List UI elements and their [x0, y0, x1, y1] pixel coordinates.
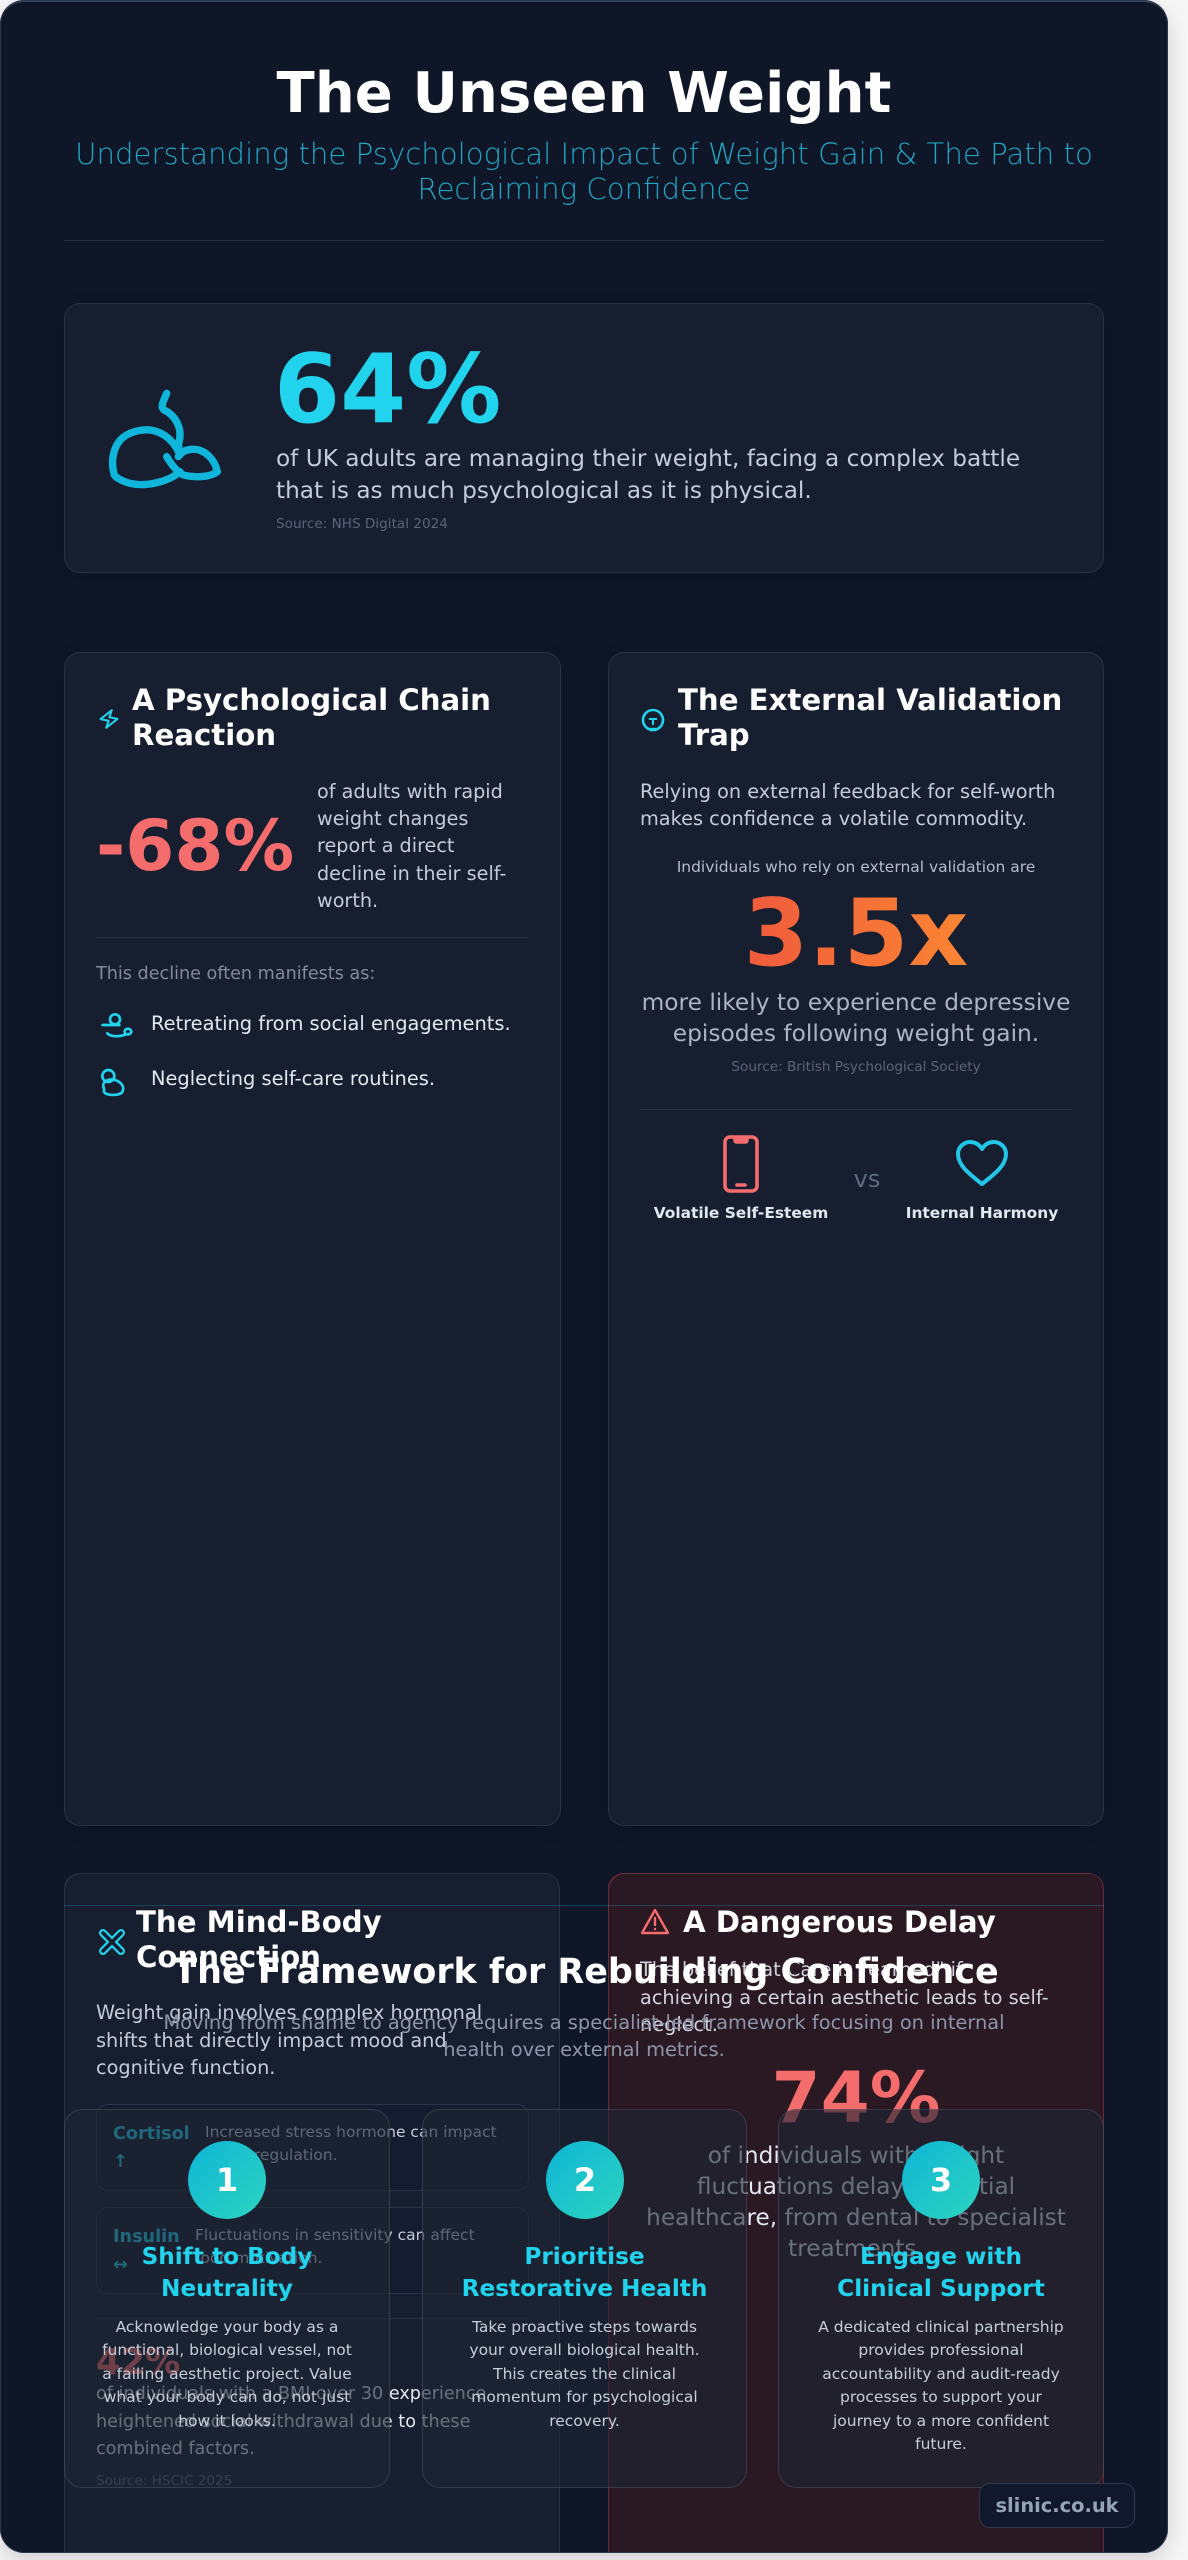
vs label: vs: [854, 1165, 880, 1193]
stat description: treatments.: [788, 2234, 924, 2262]
stat: 42%: 42%: [96, 2342, 180, 2383]
stat description: worth.: [317, 889, 378, 912]
label: Volatile Self-Esteem: [654, 1204, 828, 1222]
step text: accountability and audit-ready: [822, 2365, 1060, 2383]
hero description: [276, 445, 1020, 504]
icon: warning triangle: [640, 1908, 670, 1934]
stat: 74%: 74%: [772, 2056, 940, 2138]
stat: -68%: -68%: [96, 804, 294, 887]
body text: shifts that directly impact mood and: [96, 2029, 447, 2052]
stat description: weight changes: [317, 807, 468, 830]
badge: slinic.co.uk: slinic.co.uk: [995, 2494, 1119, 2517]
metric name: [113, 2227, 180, 2275]
body text: [96, 2001, 482, 2079]
step title: [837, 2243, 1045, 2302]
stat description: of individuals with weight: [708, 2142, 1004, 2168]
metric name: ↑: [113, 2152, 128, 2172]
step number: 1: [216, 2161, 238, 2199]
heading: Connection: [136, 1940, 321, 1974]
heading: [678, 682, 1062, 752]
step text: recovery.: [549, 2412, 620, 2430]
metric description: [205, 2122, 497, 2164]
framework heading: The Framework for Rebuilding Confidence: [173, 1952, 999, 1992]
icon: bolt: [100, 709, 118, 729]
step text: what your body can do, not just: [104, 2388, 350, 2406]
panel: external validation trap: [608, 652, 1104, 1826]
step text: Acknowledge your body as a: [116, 2318, 338, 2336]
stat description: of individuals with a BMI over 30 experience: [96, 2384, 486, 2404]
step text: journey to a more confident: [833, 2412, 1049, 2430]
step title: Engage with: [860, 2243, 1022, 2270]
stat description: [642, 989, 1070, 1047]
step text: a failing aesthetic project. Value: [102, 2365, 352, 2383]
framework subtitle: Moving from shame to agency requires a specialist-led framework focusing on internal: [163, 2011, 1005, 2034]
heading: [136, 1904, 382, 1974]
metric description: Increased stress hormone can impact: [205, 2122, 497, 2140]
stat description: [317, 780, 506, 912]
heading: [132, 683, 491, 752]
step number: [546, 2141, 624, 2219]
step title: Restorative Health: [462, 2274, 707, 2302]
stat description: [646, 2142, 1066, 2262]
step title: Prioritise: [524, 2243, 645, 2270]
body text: Weight gain involves complex hormonal: [96, 2001, 482, 2024]
source: Source: HSCIC 2025: [96, 2473, 232, 2489]
heading: The Mind-Body: [136, 1904, 382, 1938]
stat description: fluctuations delay essential: [697, 2172, 1015, 2200]
step text: processes to support your: [840, 2388, 1042, 2406]
stat description: [96, 2384, 486, 2459]
hero description: that is as much psychological as it is physical.: [276, 477, 812, 504]
step number: [902, 2141, 980, 2219]
step title: [462, 2243, 707, 2302]
manifests intro: This decline often manifests as:: [96, 964, 375, 984]
step number: [188, 2141, 266, 2219]
step text: [469, 2318, 700, 2430]
step number: 3: [930, 2161, 952, 2199]
panel: hero stat: [64, 303, 1104, 573]
panel: dangerous delay: [608, 1873, 1104, 2553]
card: step 3: [778, 2109, 1104, 2488]
step text: Take proactive steps towards: [472, 2318, 697, 2336]
metric name: ↔: [113, 2255, 128, 2275]
framework subtitle: [163, 2011, 1005, 2061]
stat description: heightened social withdrawal due to these: [96, 2412, 470, 2432]
step text: your overall biological health.: [469, 2341, 700, 2359]
step text: [102, 2318, 352, 2430]
framework section: [64, 1905, 1104, 2489]
hero description: of UK adults are managing their weight, facing a complex battle: [276, 445, 1020, 472]
metric name: Cortisol: [113, 2124, 190, 2144]
intro text: Relying on external feedback for self-worth: [640, 780, 1055, 802]
title: The Unseen Weight: [277, 61, 891, 126]
card: step 2: [422, 2109, 747, 2488]
body text: achieving a certain aesthetic leads to self-: [640, 1986, 1049, 2009]
stat description: of adults with rapid: [317, 780, 503, 803]
metric description: Fluctuations in sensitivity can affect: [195, 2226, 475, 2244]
stat description: combined factors.: [96, 2439, 255, 2459]
metric description: [195, 2226, 475, 2267]
icon: social retreat: [101, 1013, 133, 1038]
source: Source: British Psychological Society: [731, 1059, 981, 1075]
intro text: makes confidence a volatile commodity.: [640, 807, 1027, 830]
heading: Reaction: [132, 718, 276, 752]
body text: neglect.: [640, 2013, 718, 2036]
stat description: healthcare, from dental to specialist: [646, 2204, 1066, 2230]
metric description: food motivation.: [195, 2249, 322, 2267]
badge: slinic.co.uk: [979, 2483, 1135, 2528]
subtitle: Understanding the Psychological Impact of Weight Gain & The Path to: [75, 137, 1093, 171]
subtitle: Reclaiming Confidence: [417, 172, 751, 206]
metric description: mood regulation.: [205, 2146, 337, 2164]
icon: cross: [99, 1929, 125, 1955]
source: Source: NHS Digital 2024: [276, 516, 448, 532]
body text: cognitive function.: [96, 2056, 275, 2079]
step text: [818, 2318, 1064, 2453]
metric name: Insulin: [113, 2227, 180, 2247]
framework subtitle: health over external metrics.: [443, 2038, 725, 2061]
stat: 3.5x: 3.5x: [744, 878, 968, 986]
subtitle: [75, 137, 1093, 206]
step text: future.: [915, 2435, 967, 2453]
panel: psychological chain reaction: [64, 652, 561, 1826]
intro text: [640, 780, 1055, 830]
label: Internal Harmony: [906, 1204, 1058, 1222]
stat description: report a direct: [317, 834, 454, 857]
card: step 1: [64, 2109, 390, 2488]
step title: Shift to Body: [142, 2243, 312, 2270]
metric: insulin: [96, 2207, 529, 2294]
heading: Trap: [678, 718, 750, 752]
body text: [640, 1958, 1049, 2036]
heading: A Dangerous Delay: [683, 1904, 996, 1938]
list item: Retreating from social engagements.: [151, 1012, 511, 1035]
metric: cortisol: [96, 2104, 529, 2191]
panel: mind-body connection: [64, 1873, 560, 2553]
icon: self care: [101, 1068, 124, 1096]
step title: [142, 2243, 312, 2302]
stat description: more likely to experience depressive: [642, 989, 1070, 1016]
stat description: episodes following weight gain.: [673, 1020, 1039, 1047]
heading: A Psychological Chain: [132, 683, 491, 717]
step text: A dedicated clinical partnership: [818, 2318, 1064, 2336]
step title: Neutrality: [161, 2274, 293, 2302]
comparison: [654, 1135, 1058, 1222]
heading: The External Validation: [678, 682, 1062, 716]
stat description: decline in their self-: [317, 862, 506, 885]
step number: 2: [574, 2161, 596, 2199]
lead in: Individuals who rely on external validation are: [677, 858, 1035, 876]
step text: provides professional: [858, 2341, 1024, 2359]
step text: momentum for psychological: [471, 2388, 698, 2406]
list item: Neglecting self-care routines.: [151, 1067, 435, 1090]
step text: This creates the clinical: [493, 2365, 676, 2383]
icon: bulb target: [642, 708, 664, 732]
icon: phone: [723, 1135, 759, 1193]
icon: heart: [956, 1140, 1008, 1186]
step title: Clinical Support: [837, 2274, 1045, 2302]
step text: how it looks.: [178, 2412, 276, 2430]
metric name: [113, 2124, 190, 2172]
step text: functional, biological vessel, not: [102, 2341, 352, 2359]
icon: apple and body: [108, 390, 221, 488]
stat: 64%: 64%: [274, 335, 501, 445]
body text: The belief that Care is "earned" if: [640, 1958, 963, 1981]
